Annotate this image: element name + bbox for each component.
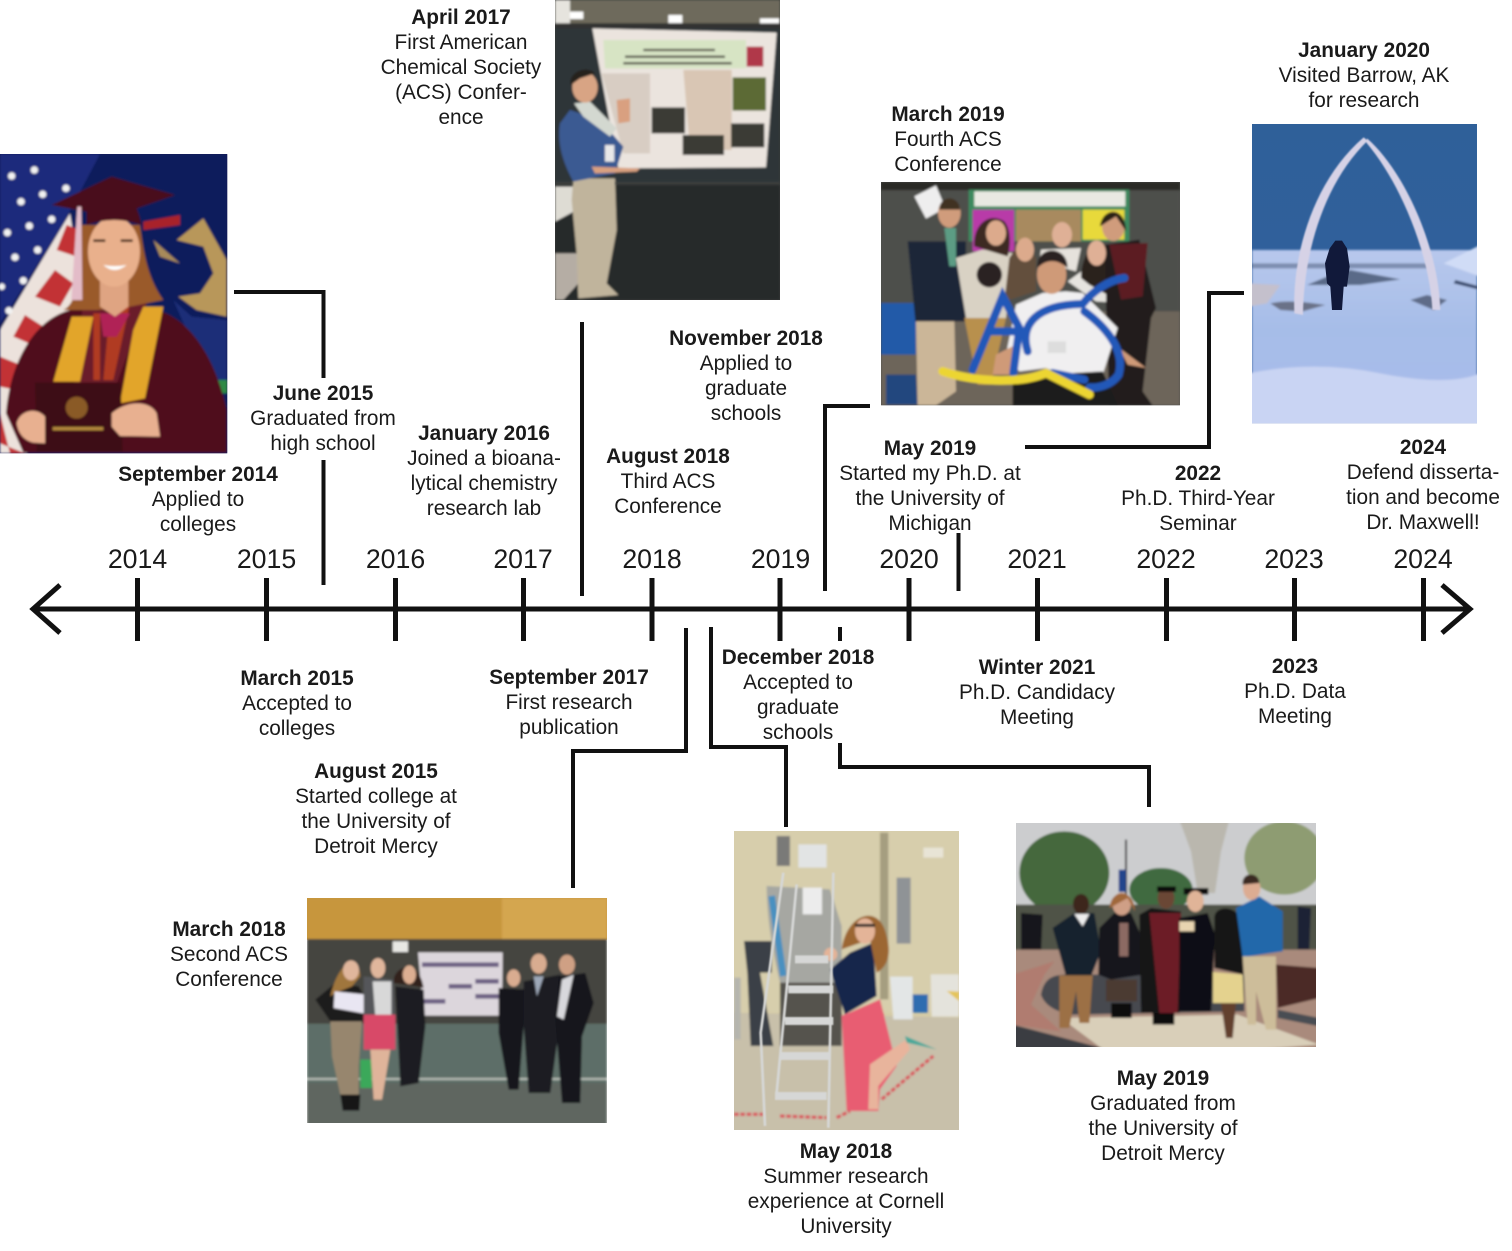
year labels: 2019 [751,544,810,574]
event: 2023: Meeting [1258,705,1332,728]
event: June 2015: high school [270,432,376,455]
event: March 2019: Conference [894,153,1002,176]
event: March 2018: Conference [175,968,283,991]
event: May 2019 Ph.D.: May 2019 [884,437,976,460]
event: November 2018 [669,327,823,425]
event: August 2018 [606,445,730,518]
year labels: 2021 [1007,544,1067,574]
photo: graduation portrait [0,154,227,453]
event: November 2018: graduate [705,377,787,400]
event: May 2019 Ph.D.: Michigan [888,512,972,535]
event: June 2015: June 2015 [273,382,373,405]
event: 2024: Dr. Maxwell! [1366,511,1480,534]
event: 2022: 2022 [1175,462,1221,485]
event: January 2020: January 2020 [1298,39,1430,62]
event: May 2019 graduation: the University of [1088,1117,1238,1140]
person [1325,241,1350,310]
timeline axis [33,578,1470,641]
event: August 2018: August 2018 [606,445,730,468]
event: April 2017 [381,6,542,129]
event: August 2015: Started college at [295,785,457,808]
event: January 2016: lytical chemistry [411,472,558,495]
year labels: 2022 [1136,544,1196,574]
event: 2022: Ph.D. Third-Year [1121,487,1275,510]
event: November 2018: November 2018 [669,327,823,350]
event: 2024: 2024 [1400,436,1447,459]
year labels: 2017 [493,544,553,574]
event: March 2015 [240,667,354,740]
event: January 2016: Joined a bioana- [407,447,561,470]
event: April 2017: ence [438,106,484,129]
event: May 2018: University [800,1215,892,1238]
ladder [761,873,833,1128]
event: May 2019 graduation: Graduated from [1090,1092,1236,1115]
event: Winter 2021: Winter 2021 [979,656,1095,679]
event: May 2019 Ph.D.: the University of [855,487,1005,510]
event: 2023: Ph.D. Data [1244,680,1346,703]
event: September 2017: September 2017 [489,666,649,689]
event: 2024 [1346,436,1500,534]
event: September 2014: colleges [160,513,236,536]
connector lines [234,292,1244,888]
whale bone arch [1294,137,1440,315]
event: August 2015: August 2015 [314,760,438,783]
photo: fourth ACS conference group [881,182,1180,405]
event: 2022: Seminar [1159,512,1237,535]
photo: Barrow whale bone arch [1249,124,1480,427]
event: March 2018: March 2018 [172,918,286,941]
photo: first ACS poster [555,0,780,300]
year labels [108,544,1453,574]
event: December 2018: December 2018 [722,646,874,669]
event: December 2018: graduate [757,696,839,719]
arrow: right [1442,585,1470,633]
event: December 2018: schools [763,721,833,744]
event: March 2015: colleges [259,717,335,740]
event: August 2015 [295,760,457,858]
event: March 2018 [170,918,288,991]
year labels: 2016 [366,544,425,574]
event: Winter 2021: Meeting [1000,706,1074,729]
year labels: 2024 [1393,544,1453,574]
event: December 2018: Accepted to [743,671,853,694]
photo: University of Detroit Mercy graduation [1013,820,1324,1050]
event: 2024: tion and become [1346,486,1500,509]
event: September 2017 [489,666,649,739]
event: March 2019: March 2019 [891,103,1005,126]
event: January 2016: January 2016 [418,422,550,445]
event: March 2018: Second ACS [170,943,288,966]
event: August 2018: Third ACS [621,470,715,493]
event: May 2019 graduation: Detroit Mercy [1101,1142,1225,1165]
event: June 2015 [250,382,396,455]
event: June 2015: Graduated from [250,407,396,430]
event: May 2019 Ph.D. [839,437,1021,535]
event: 2023 [1244,655,1346,728]
event: September 2014: Applied to [152,488,244,511]
event: April 2017: First American [395,31,527,54]
event: December 2018 [722,646,874,744]
event: May 2018: experience at Cornell [748,1190,944,1213]
event: September 2014 [118,463,278,536]
event: August 2015: Detroit Mercy [314,835,438,858]
event: March 2015: Accepted to [242,692,352,715]
event: March 2019: Fourth ACS [894,128,1002,151]
event: May 2018: Summer research [763,1165,929,1188]
event: 2022 [1121,462,1275,535]
year ticks [138,578,1424,641]
event: January 2020: for research [1309,89,1419,112]
event: August 2018: Conference [614,495,722,518]
arrow: left [33,585,60,633]
event: January 2016 [407,422,561,520]
event: November 2018: schools [711,402,781,425]
event: May 2019 Ph.D.: Started my Ph.D. at [839,462,1021,485]
event: April 2017: Chemical Society [381,56,542,79]
event: 2023: 2023 [1272,655,1318,678]
year labels: 2023 [1264,544,1324,574]
event: September 2017: publication [519,716,619,739]
event: January 2020 [1279,39,1449,112]
event: May 2019 graduation: May 2019 [1117,1067,1209,1090]
event: August 2015: the University of [301,810,451,833]
event: March 2019 [891,103,1005,176]
event: May 2019 graduation [1088,1067,1238,1165]
event: March 2015: March 2015 [240,667,354,690]
event: November 2018: Applied to [700,352,792,375]
year labels: 2014 [108,544,167,574]
event: May 2018 [748,1140,944,1238]
event: Winter 2021: Ph.D. Candidacy [959,681,1116,704]
event: May 2018: May 2018 [800,1140,892,1163]
event: January 2020: Visited Barrow, AK [1279,64,1449,87]
event: September 2014: September 2014 [118,463,278,486]
event: April 2017: April 2017 [411,6,511,29]
year labels: 2018 [622,544,682,574]
year labels: 2015 [237,544,296,574]
event: September 2017: First research [505,691,633,714]
photo: Cornell NMR lab [730,828,963,1134]
year labels: 2020 [879,544,939,574]
event: Winter 2021 [959,656,1116,729]
event: 2024: Defend disserta- [1347,461,1499,484]
event: April 2017: (ACS) Confer- [395,81,527,104]
photo: second ACS conference group [307,898,607,1126]
event: January 2016: research lab [427,497,541,520]
